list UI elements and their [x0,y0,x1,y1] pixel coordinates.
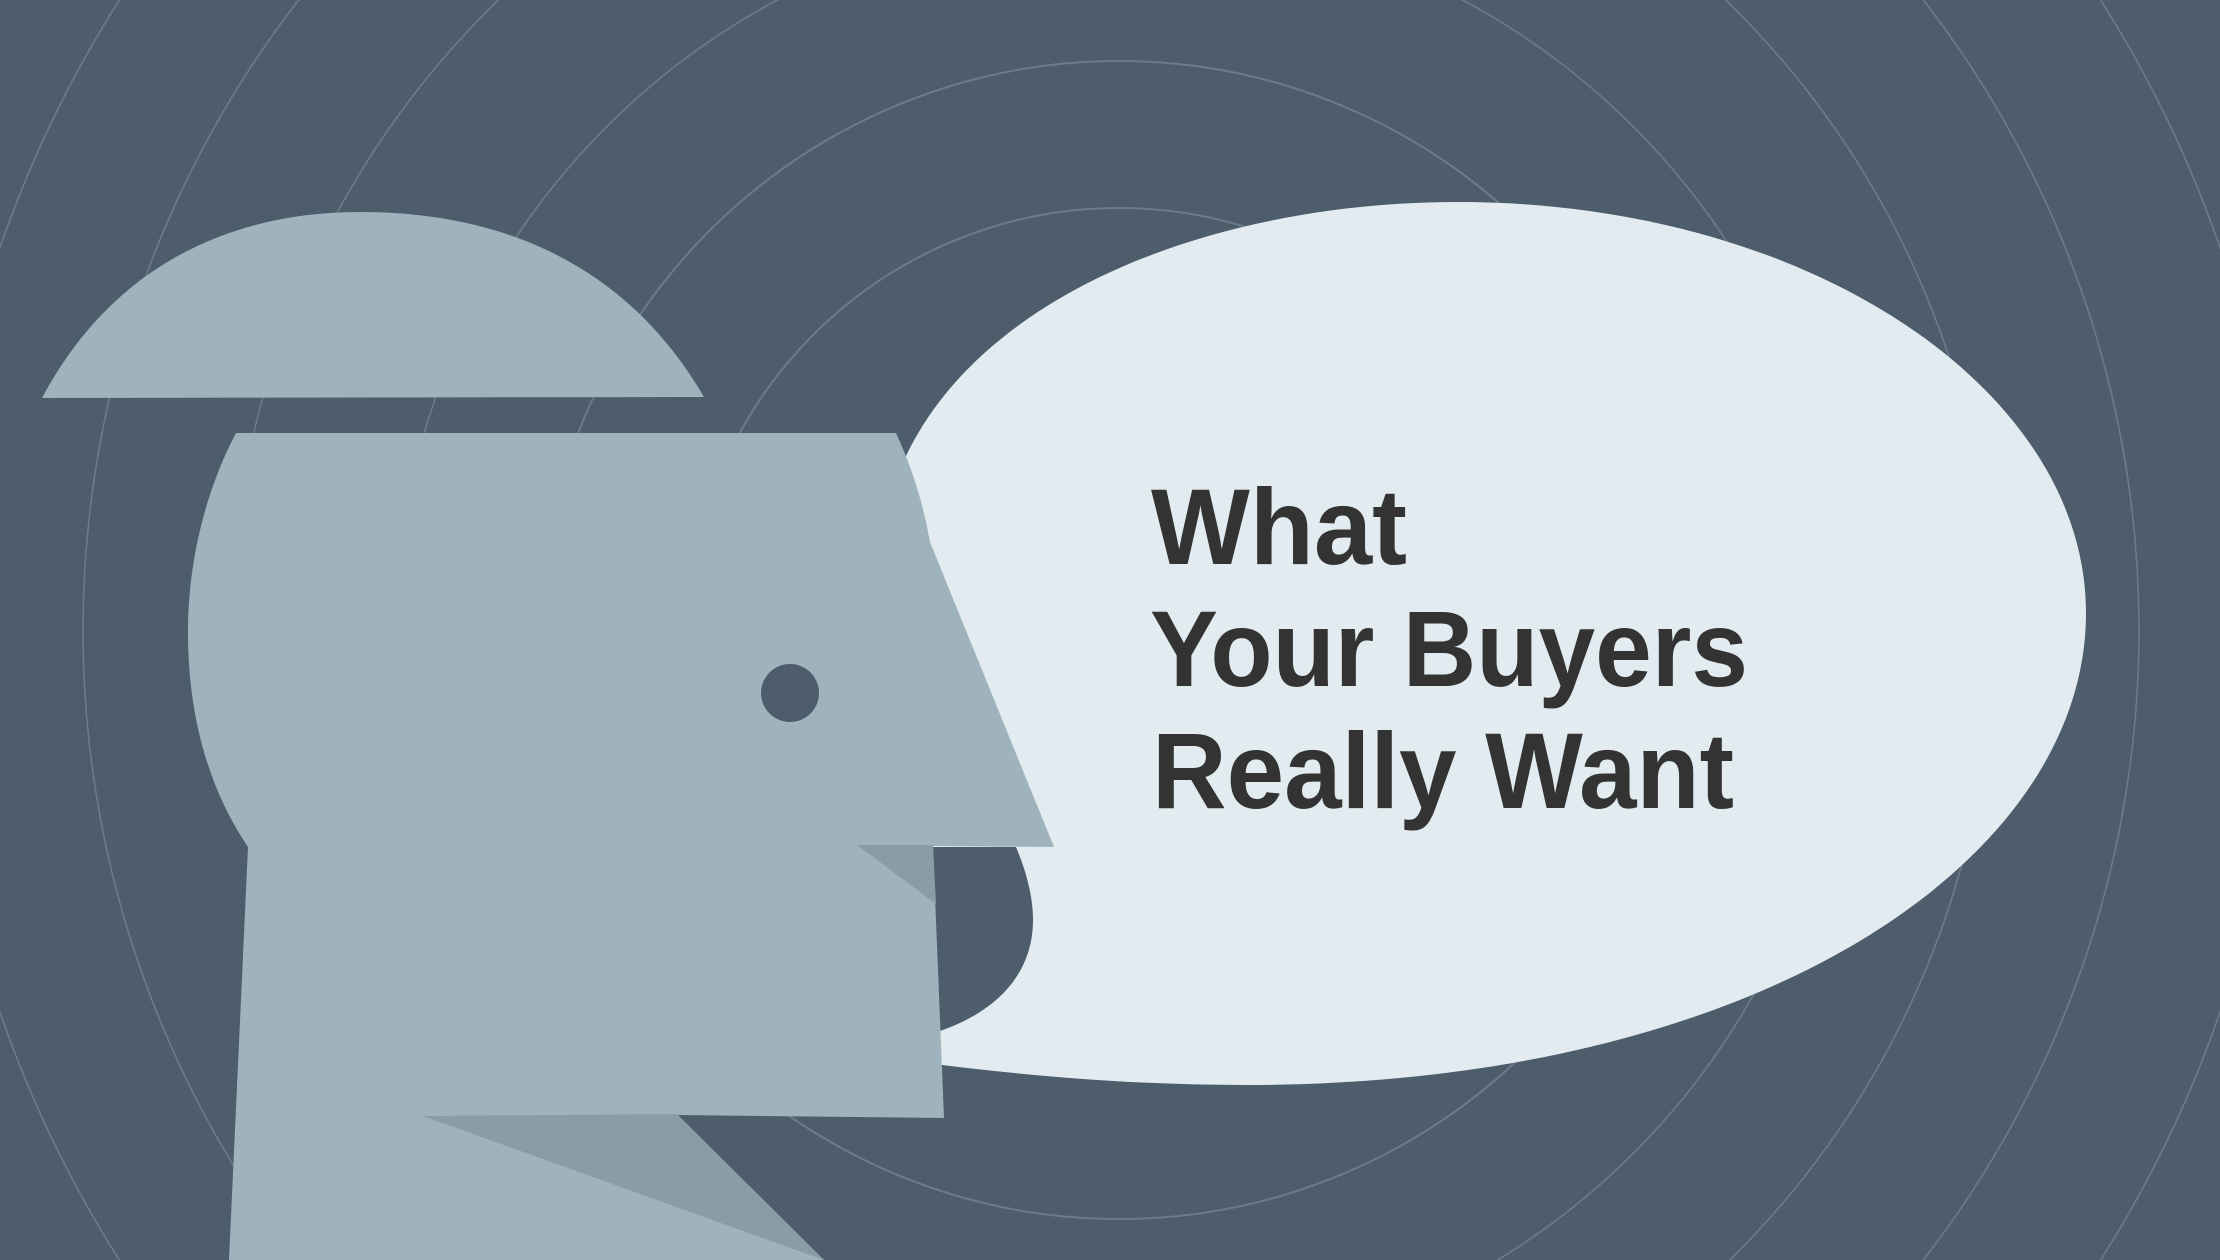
speech bubble [880,202,2086,1085]
title: What [1151,466,1407,587]
icon: nose shadow [857,845,936,904]
title [1150,466,1748,831]
icon: eye [761,664,819,722]
icon: collar shadow [423,1114,824,1260]
icon: head and torso [188,433,1054,1260]
title: Your Buyers [1150,588,1748,709]
mouth opening [900,847,1033,1040]
title: Really Want [1152,710,1734,831]
icon: head top dome [42,212,704,398]
